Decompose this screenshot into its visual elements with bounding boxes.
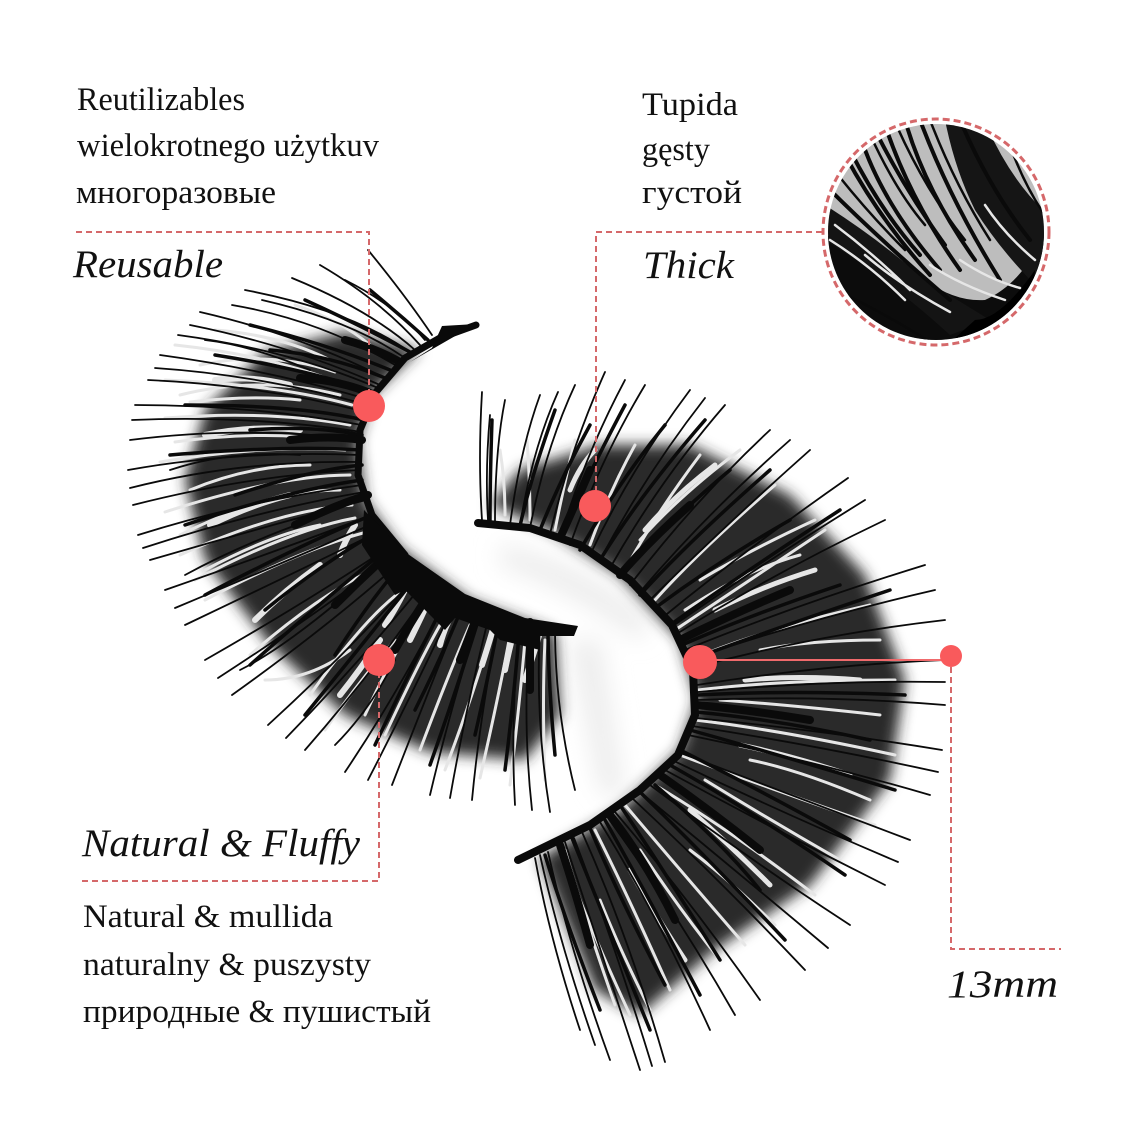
left eyelash band (358, 324, 578, 650)
text block: natural and fluffy translations (83, 899, 431, 1030)
leader line: reusable (76, 232, 369, 406)
text block: natural and fluffy translations: naturalny & puszysty (83, 947, 372, 983)
heading: natural and fluffy: Natural & Fluffy (81, 822, 361, 865)
text block: reusable translations: wielokrotnego użytkuv (77, 128, 379, 164)
text block: natural and fluffy translations: Natural & mullida (83, 899, 333, 935)
heading: reusable: Reusable (72, 243, 223, 286)
heading: thick: Thick (643, 244, 735, 287)
leader line: natural and fluffy (82, 660, 379, 881)
right eyelash (478, 372, 945, 1070)
text block: natural and fluffy translations: природные & пушистый (83, 994, 431, 1030)
heading: length 13mm: 13mm (947, 963, 1058, 1006)
leader line: 13mm solid (700, 657, 951, 660)
text block: thick translations (642, 87, 742, 211)
text block: reusable translations: многоразовые (76, 175, 276, 211)
text block: thick translations: gęsty (642, 132, 710, 168)
text block: thick translations: густой (642, 175, 742, 211)
marker dot: thick (579, 490, 611, 522)
right eyelash band (478, 523, 695, 860)
dark band in close-up (828, 233, 1044, 340)
inset circle: thick lash close-up (823, 119, 1050, 345)
marker dot: length end (940, 645, 962, 667)
text block: reusable translations (76, 82, 379, 211)
leader line: thick (596, 232, 822, 506)
marker dot: reusable (353, 390, 385, 422)
text block: reusable translations: Reutilizables (77, 82, 245, 118)
text block: thick translations: Tupida (642, 87, 738, 123)
marker dot: length start (683, 645, 717, 679)
leader line: 13mm dashed (951, 657, 1061, 949)
left eyelash (128, 250, 578, 812)
soft shadows under lashes (500, 545, 650, 800)
marker dot: natural and fluffy (363, 644, 395, 676)
